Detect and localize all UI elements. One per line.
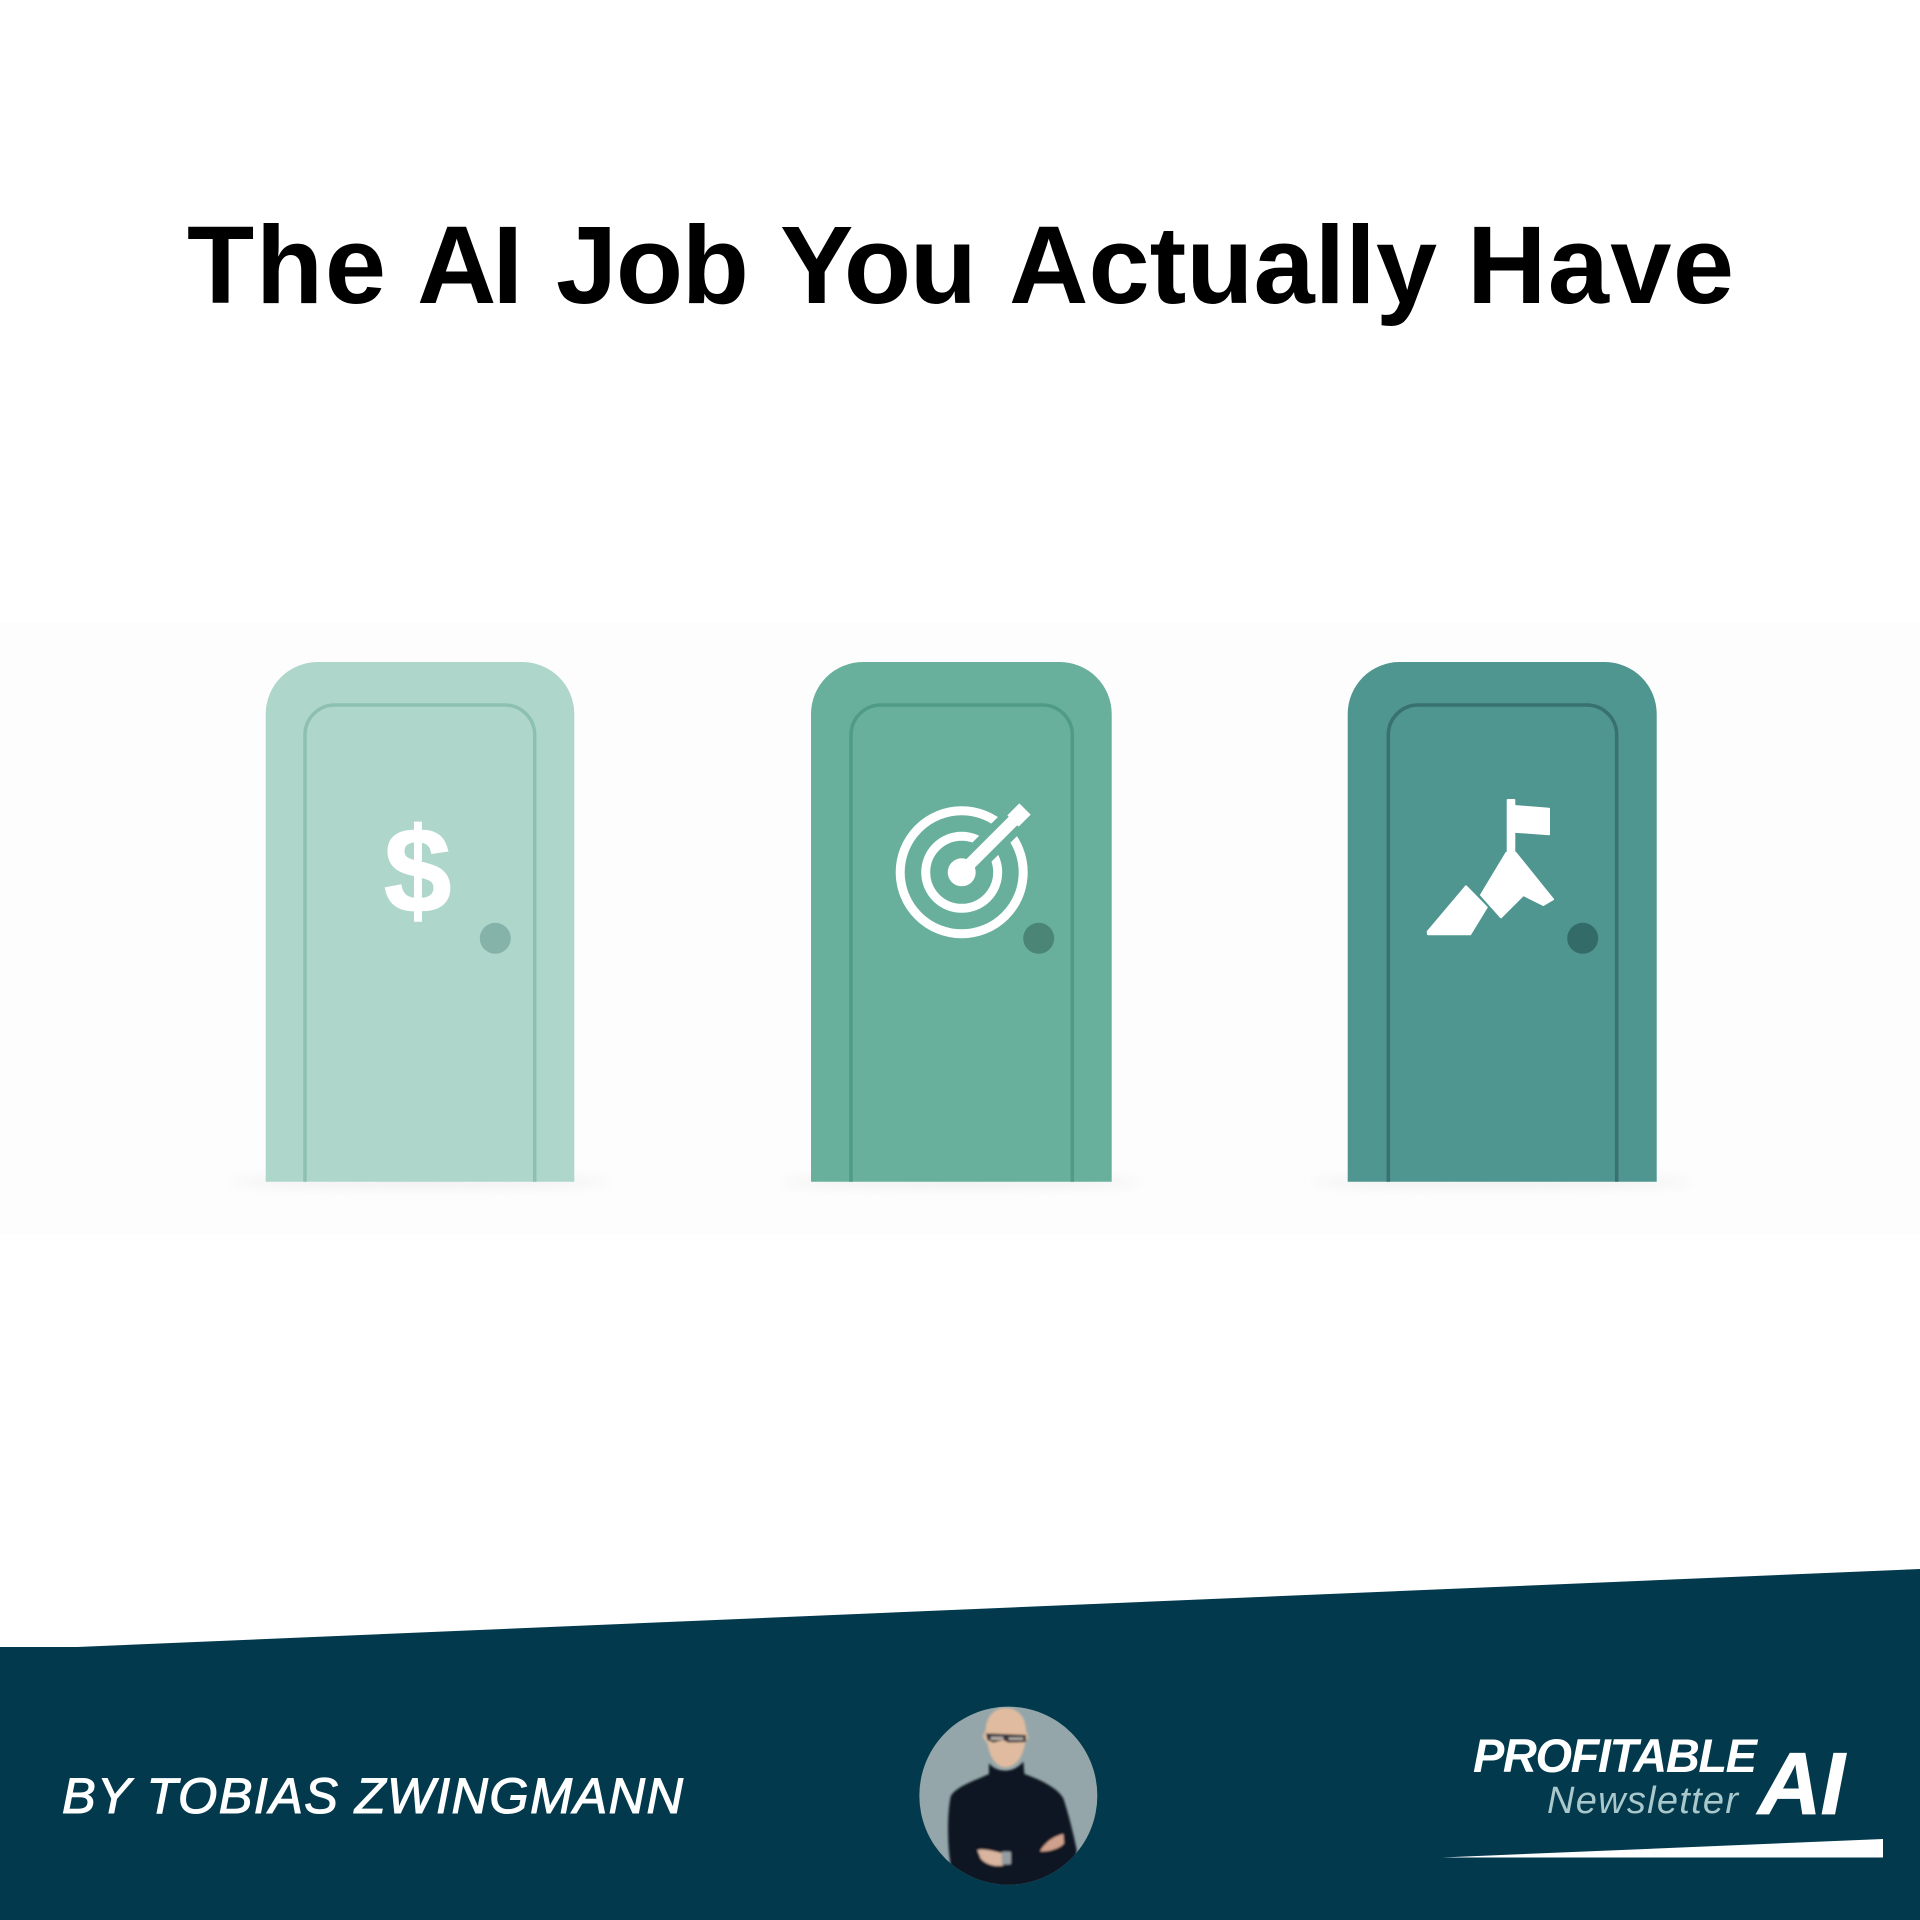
panel: door illustrations — [230, 662, 1692, 1186]
title: Have — [1467, 204, 1734, 327]
title: Actually — [1009, 204, 1437, 327]
logo: Profitable AI Newsletter: AI — [1756, 1734, 1847, 1833]
title: Job — [556, 204, 749, 327]
logo: Profitable AI Newsletter: PROFITABLE — [1473, 1729, 1759, 1782]
icon: mountain with flag — [1428, 800, 1553, 934]
icon: target with arrow — [900, 809, 1025, 934]
door 3: summit — [1312, 662, 1692, 1186]
portrait photo — [917, 1703, 1100, 1893]
title: You — [780, 204, 977, 327]
footer band — [0, 1569, 1920, 1920]
title: AI — [417, 204, 523, 327]
door 2: target — [781, 662, 1141, 1186]
icon: dollar sign: $ — [384, 802, 451, 938]
byline: BY TOBIAS ZWINGMANN — [62, 1767, 684, 1824]
logo: Profitable AI Newsletter — [1442, 1729, 1883, 1858]
door 1: money — [230, 662, 610, 1186]
logo: Profitable AI Newsletter: Newsletter — [1547, 1780, 1739, 1822]
title: The — [187, 204, 386, 327]
